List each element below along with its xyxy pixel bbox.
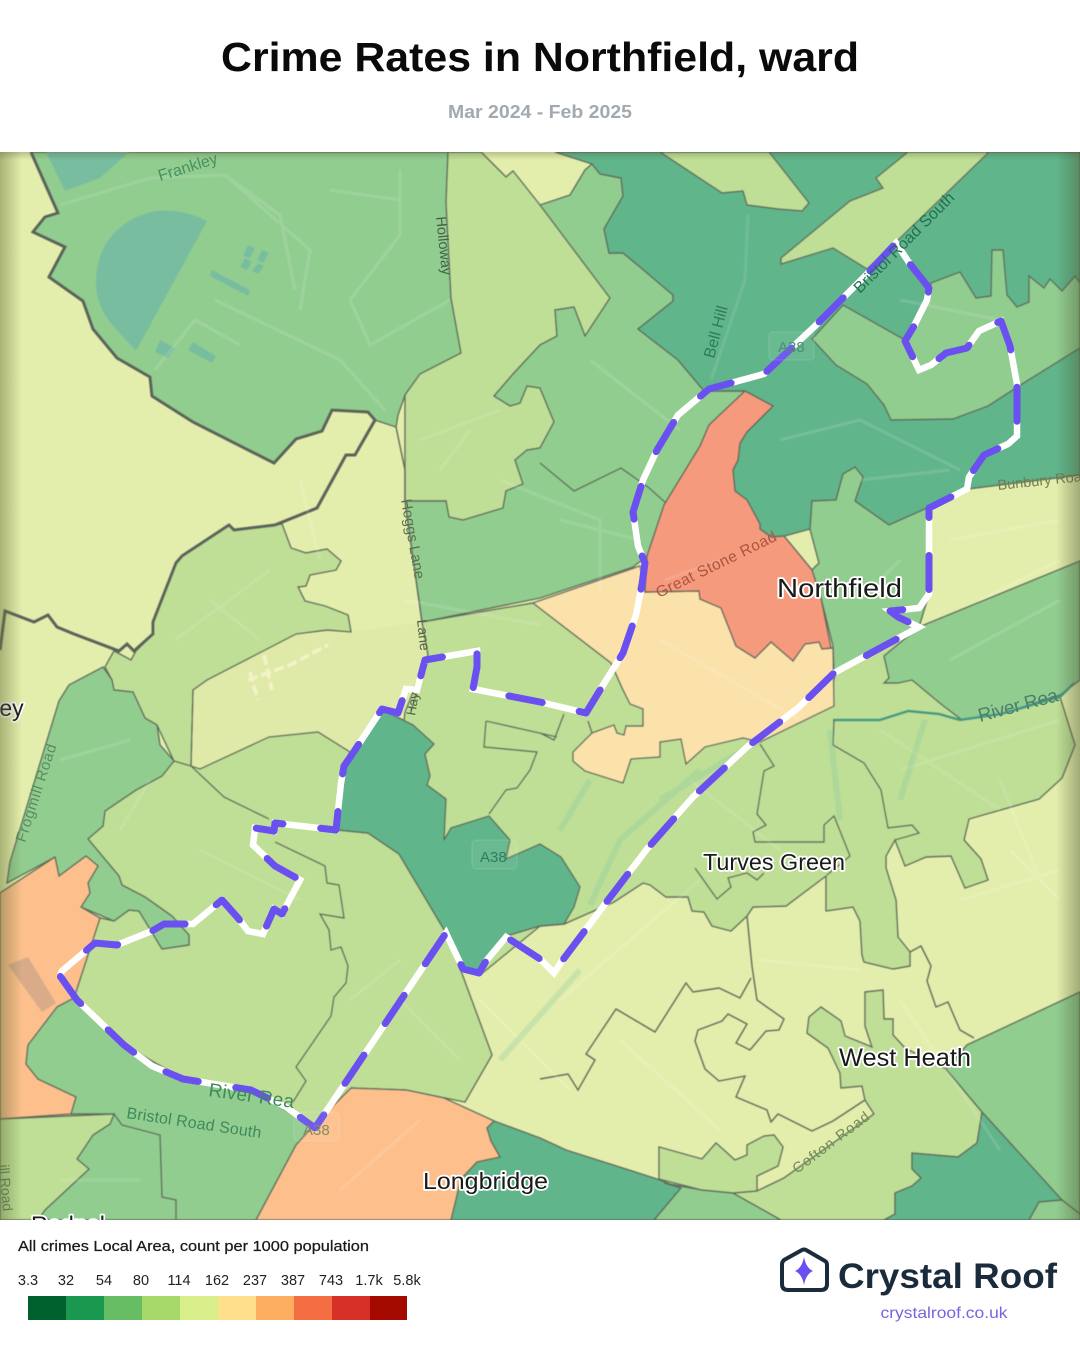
road label: Holloway: Holloway xyxy=(432,216,454,277)
road network faint xyxy=(60,170,1060,1190)
legend tick labels: 5.8k xyxy=(393,1273,421,1289)
area: south mid green xyxy=(26,998,313,1220)
road label: Frankley: Frankley xyxy=(156,151,220,185)
area: Longbridge dark green xyxy=(451,1121,681,1220)
interior boundaries xyxy=(114,427,974,1220)
area: south mid green 2 xyxy=(654,1183,781,1220)
area: north-east dark green xyxy=(555,152,1080,537)
area: West Heath light green xyxy=(733,990,982,1220)
place label: Northfield: Northfield xyxy=(777,573,902,603)
area: top light green strip xyxy=(781,152,989,269)
road label: Hoggs Lane: Hoggs Lane xyxy=(397,498,428,580)
map edge vignette xyxy=(0,152,1080,1220)
badge: A38 north xyxy=(769,332,814,360)
place label: West Heath: West Heath xyxy=(839,1044,971,1072)
road label: River Rea east: River Rea xyxy=(976,685,1061,727)
badge: A38 centre: A38 xyxy=(480,849,507,866)
grey car park patch xyxy=(8,957,56,1012)
legend tick labels: 1.7k xyxy=(355,1273,383,1289)
area: top light green wedge xyxy=(660,152,809,211)
place labels xyxy=(0,573,971,1239)
area: south-west light green xyxy=(74,732,492,1126)
area: Longbridge orange xyxy=(256,1088,500,1220)
road label: Frogmill Road: Frogmill Road xyxy=(13,742,60,844)
legend colour scale xyxy=(28,1296,407,1320)
map background: lowest band pale green xyxy=(0,152,1080,1220)
legend tick labels: 237 xyxy=(243,1273,267,1289)
logo url: crystalroof.co.uk xyxy=(880,1305,1009,1322)
area: Northfield centre mid green xyxy=(810,467,929,672)
legend tick labels: 162 xyxy=(205,1273,229,1289)
area: east mid green xyxy=(884,561,1080,720)
area: south-east mid green xyxy=(946,992,1080,1214)
choropleth areas xyxy=(0,152,1080,1220)
logo: Crystal Roof xyxy=(782,1250,1057,1322)
legend xyxy=(18,1239,421,1320)
top-left water xyxy=(46,152,129,191)
legend tick labels: 32 xyxy=(58,1273,74,1289)
ward boundary: white line xyxy=(60,243,1017,1128)
legend tick labels: 114 xyxy=(167,1273,191,1289)
legend tick labels: 54 xyxy=(96,1273,112,1289)
river Rea xyxy=(833,683,1074,720)
road label: Lane: Lane xyxy=(414,619,433,652)
area: west mid green xyxy=(7,667,189,949)
logo wordmark: Crystal Roof xyxy=(838,1257,1057,1296)
area: Frankley mid green xyxy=(31,152,461,463)
thick authority boundary xyxy=(0,152,375,651)
badge: A38 south xyxy=(294,1112,339,1141)
subtitle: date range: Mar 2024 - Feb 2025 xyxy=(448,101,632,122)
area: Hollow Way light green xyxy=(405,152,610,520)
area: west orange xyxy=(0,856,100,1119)
road labels xyxy=(0,151,1080,1212)
area: salmon highest crime xyxy=(645,391,831,661)
reservoir xyxy=(96,210,207,351)
legend tick labels: 80 xyxy=(133,1273,149,1289)
road label: Bristol Road South: Bristol Road South xyxy=(851,189,958,297)
area: south light green blob xyxy=(659,1135,783,1193)
road label: Hays: Hay xyxy=(403,691,422,717)
place label: Rednal: Rednal xyxy=(31,1212,105,1239)
road label: Cofton Road: Cofton Road xyxy=(790,1109,873,1177)
title: Crime Rates in Northfield, ward xyxy=(221,34,859,80)
icon: house with star xyxy=(782,1250,827,1290)
legend tick labels xyxy=(18,1273,421,1289)
area: cream high crime xyxy=(533,566,834,783)
road label: River Rea south: River Rea xyxy=(207,1080,296,1113)
area: south-east dark green xyxy=(884,1112,1062,1220)
area: central mid green xyxy=(405,164,745,622)
area: west light green xyxy=(105,524,351,766)
area: central southern light green xyxy=(400,603,1075,975)
area: north-east mid green inside ward xyxy=(812,250,1080,420)
area: south-west corner light green xyxy=(0,1114,114,1220)
legend tick labels: 387 xyxy=(281,1273,305,1289)
road label: Bristol Road South, south: Bristol Road South xyxy=(125,1105,262,1142)
legend heading: All crimes Local Area, count per 1000 population xyxy=(18,1239,369,1255)
ward boundary: purple dashes xyxy=(60,243,1017,1128)
badge: A38 centre xyxy=(472,840,517,869)
badge: A38 south: A38 xyxy=(303,1122,330,1139)
area: central dark green xyxy=(337,711,580,973)
small ponds xyxy=(155,245,269,363)
road label: Great Stone Road: Great Stone Road xyxy=(653,528,779,602)
legend tick labels: 743 xyxy=(319,1273,343,1289)
road label: Bell Hill: Bell Hill xyxy=(701,304,732,360)
badge: A38 north: A38 xyxy=(778,339,805,356)
area: far south-east corner xyxy=(1029,1200,1080,1220)
legend tick labels: 3.3 xyxy=(18,1273,38,1289)
area: pale block west of Hoggs Lane xyxy=(191,622,428,769)
place label: Longbridge: Longbridge xyxy=(423,1168,548,1194)
place label: Turves Green: Turves Green xyxy=(703,849,845,875)
